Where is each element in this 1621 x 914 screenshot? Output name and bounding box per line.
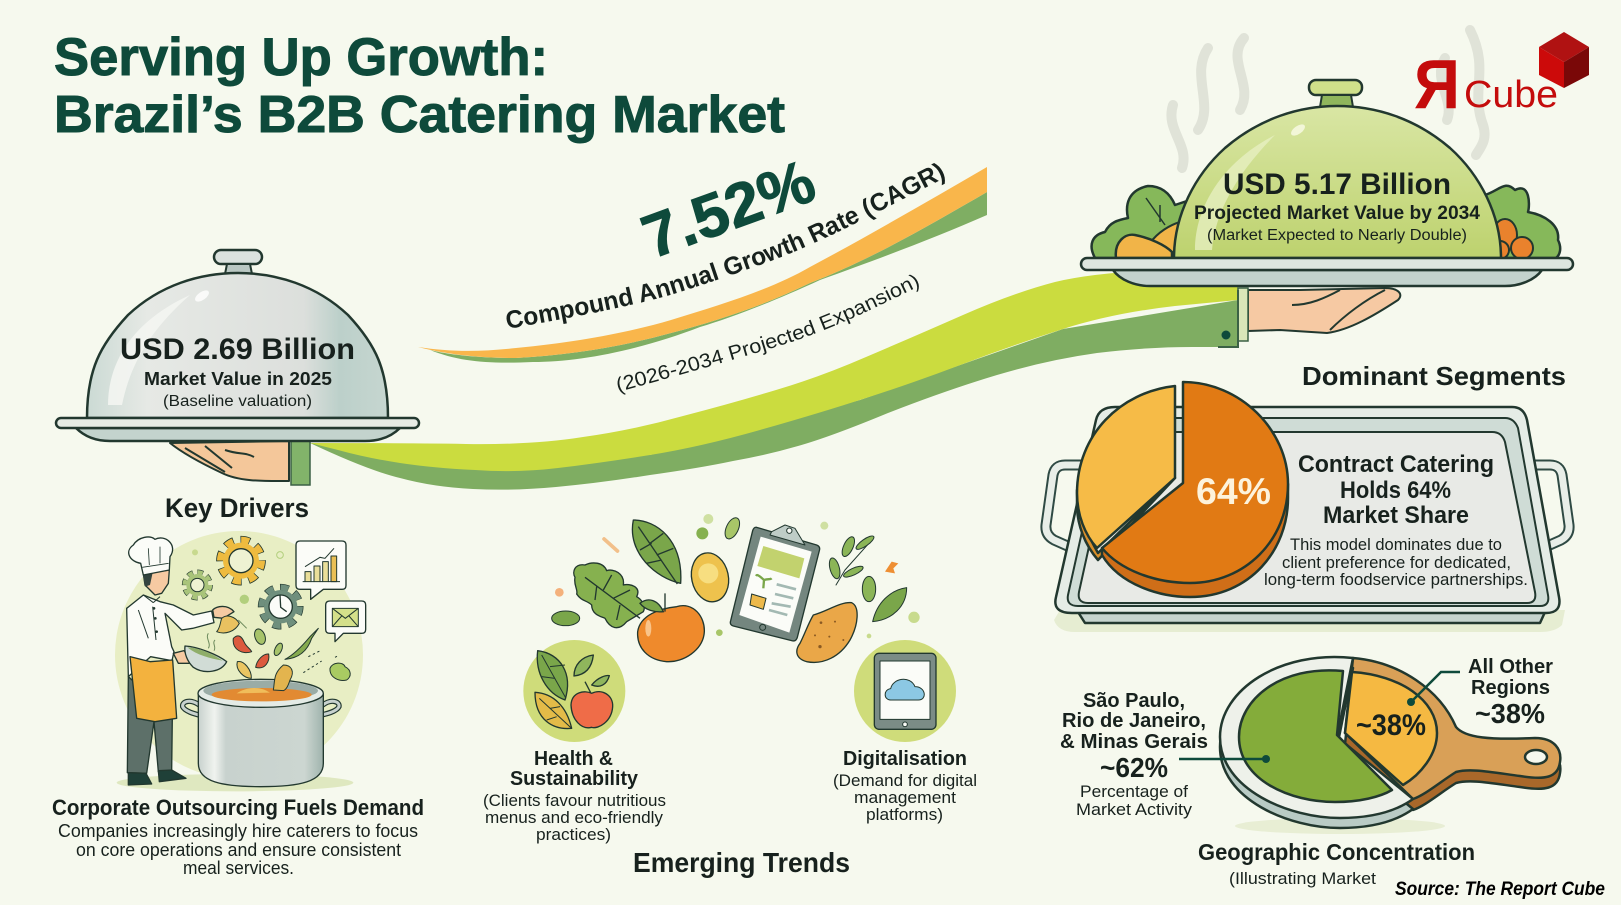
illustration: emerging trends food arc — [523, 514, 956, 742]
icon: bowl and hand — [173, 606, 247, 672]
value: USD 5.17 Billion — [1223, 168, 1451, 201]
icon: falling ingredients — [192, 549, 350, 680]
icon: health circle — [523, 640, 625, 742]
icon: small leaves and sprigs — [552, 514, 920, 638]
panel: geographic concentration board chart — [1060, 656, 1560, 888]
leader line: top three states — [1179, 755, 1270, 763]
icon: left hand and cuff — [170, 441, 310, 485]
text: top three states label: ~62% — [1100, 752, 1168, 783]
icon: tray body — [1055, 407, 1559, 623]
logo: RCube — [1414, 32, 1589, 123]
icon: potato — [797, 603, 857, 662]
shadow — [1235, 818, 1445, 834]
text: top three states label: Rio de Janeiro, — [1062, 710, 1206, 732]
icon: lettuce — [574, 563, 644, 628]
icon: tomato — [638, 593, 704, 662]
title — [54, 28, 785, 144]
text: other regions label: Regions — [1471, 677, 1550, 699]
text: Digitalisation: management — [854, 788, 956, 807]
text: contract catering headline: Contract Catering — [1298, 451, 1494, 478]
text: Health and Sustainability: Health & — [534, 748, 613, 770]
icon: plate — [1220, 657, 1413, 828]
heading: Dominant Segments: Dominant Segments — [1302, 361, 1566, 391]
icon: silver dome — [87, 250, 388, 418]
icon: green-tinted platter — [1081, 258, 1573, 286]
text: top three states label: Percentage of — [1080, 782, 1188, 801]
value label: Projected Market Value by 2034 — [1194, 203, 1480, 224]
text: contract catering description: This model dominates due to — [1290, 535, 1502, 554]
text: Key Driver description: Companies increasingly hire caterers to focus — [58, 821, 418, 841]
text: Digitalisation: Digitalisation — [843, 748, 967, 770]
icon: wooden paddle — [1345, 658, 1560, 810]
value note: (Baseline valuation) — [163, 393, 312, 410]
icon: apron — [130, 657, 177, 722]
tray shadow — [1054, 610, 1565, 632]
text: Health and Sustainability: (Clients favour nutritious — [483, 791, 666, 810]
text: Health and Sustainability — [483, 748, 666, 844]
text: top three states label: & Minas Gerais — [1060, 731, 1208, 753]
CAGR swoosh — [418, 167, 987, 363]
chart label: ~38%: ~38% — [1356, 709, 1426, 742]
text: Key Driver description: meal services. — [183, 858, 294, 878]
value label: Market Value in 2025 — [144, 368, 332, 389]
text: top three states label: São Paulo, — [1083, 690, 1185, 712]
icon: tray handles — [1046, 465, 1569, 548]
text: contract catering description: client preference for dedicated, — [1282, 553, 1511, 572]
pie label: 64% — [1196, 471, 1271, 512]
logo mirrored R: Я — [1414, 45, 1460, 123]
text: other regions label — [1468, 656, 1553, 729]
chart segment: ~62% green — [1239, 670, 1392, 802]
pie chart: contract catering share — [1077, 382, 1288, 597]
value: USD 2.69 Billion — [120, 333, 355, 366]
text: Digitalisation: platforms) — [866, 805, 943, 824]
text: top three states label: Market Activity — [1076, 800, 1193, 819]
heading: Key Drivers: Key Drivers — [165, 493, 309, 523]
icon: steam — [1171, 30, 1485, 168]
icon: mail bubble — [326, 601, 366, 642]
illustration: chef cooking with business icons — [115, 531, 366, 791]
text: top three states label — [1060, 690, 1208, 819]
text: Key Driver description — [58, 821, 418, 878]
icon: red cube — [1539, 32, 1589, 88]
leader line: other regions — [1407, 672, 1460, 706]
icon: digital tablet circle — [854, 640, 956, 742]
pie segment: other share — [1077, 386, 1175, 560]
heading: Geographic Concentration: Geographic Concentration — [1198, 839, 1475, 865]
icon: green dome — [1174, 80, 1501, 258]
icon: salad left — [1092, 186, 1190, 258]
CAGR label: Compound Annual Growth Rate (CAGR) — [506, 163, 945, 328]
text: contract catering headline — [1298, 451, 1494, 529]
icon: salad right — [1485, 186, 1560, 259]
note: illustrating market: (Illustrating Market — [1229, 869, 1376, 888]
icon: clock gear — [261, 587, 300, 626]
value note: (Market Expected to Nearly Double) — [1207, 227, 1467, 244]
icon: orange gear — [220, 540, 262, 581]
source credit: Source: The Report Cube — [1395, 879, 1605, 900]
icon: chef head and hat — [129, 537, 173, 595]
text: Digitalisation: (Demand for digital — [833, 771, 977, 790]
icon: chef torso and sleeves — [127, 595, 214, 677]
text: contract catering description: long-term foodservice partnerships. — [1264, 570, 1528, 589]
panel: 2025 market value cloche — [56, 250, 419, 485]
icon: stock pot — [183, 665, 339, 787]
icon: clipboard tablet — [730, 525, 820, 641]
text: Digitalisation — [833, 748, 977, 824]
title: Brazil’s B2B Catering Market — [54, 86, 785, 144]
icon: golden coin vegetable — [687, 549, 733, 605]
chart segment: ~38% yellow — [1345, 672, 1437, 785]
icon: chef legs and shoes — [127, 677, 186, 785]
heading: Emerging Trends: Emerging Trends — [633, 847, 850, 878]
text: Key Driver description: on core operations and ensure consistent — [76, 840, 401, 860]
text: contract catering description — [1264, 535, 1528, 589]
text: contract catering headline: Market Share — [1323, 502, 1469, 529]
icon: green leaf — [632, 520, 681, 584]
panel: serving tray with pie chart — [1046, 382, 1569, 632]
pie segment: 64% contract catering — [1102, 382, 1288, 597]
icon: chart bubble — [296, 541, 346, 599]
CAGR figure: 7.52% — [633, 146, 824, 271]
icon: silver platter — [56, 418, 419, 441]
text: Health and Sustainability: practices) — [536, 825, 611, 844]
icon: right hand and cuff — [1218, 288, 1400, 347]
text: Health and Sustainability: Sustainability — [510, 768, 639, 790]
text: other regions label: ~38% — [1475, 698, 1545, 729]
CAGR period note: (2026-2034 Projected Expansion) — [618, 274, 919, 395]
text: Key Driver headline: Corporate Outsourcing Fuels Demand — [52, 795, 424, 820]
text: Health and Sustainability: menus and eco-friendly — [485, 808, 663, 827]
panel: 2034 projected value cloche — [1081, 30, 1573, 347]
icon: green gear — [185, 572, 210, 598]
text: contract catering headline: Holds 64% — [1340, 477, 1451, 504]
logo wordmark: Cube — [1464, 74, 1558, 116]
title: Serving Up Growth: — [54, 28, 548, 87]
text: other regions label: All Other — [1468, 656, 1553, 678]
growth arrow: sleeve swoosh from left hand to right hand — [310, 268, 1238, 490]
